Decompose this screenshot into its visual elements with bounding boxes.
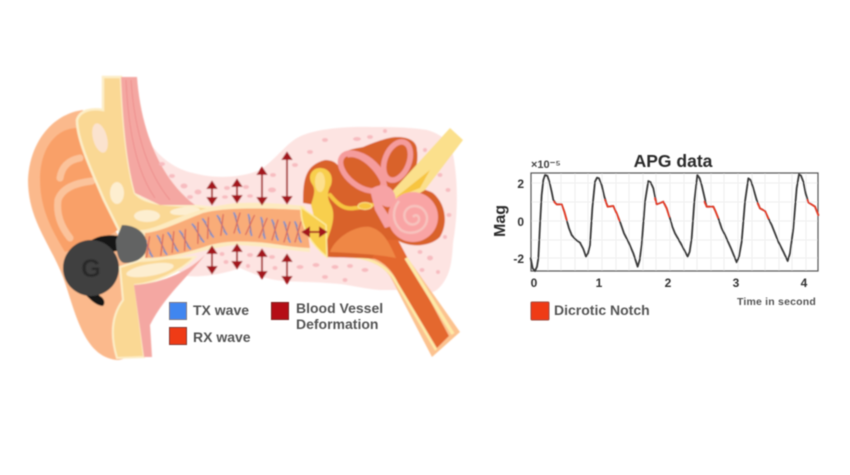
eustachian tube base [327,240,460,357]
x tick labels: 3 [733,276,740,290]
nerve inner [395,170,430,198]
canal hair cells [144,213,301,257]
legend: ear [170,300,383,345]
upper muscle streaks [126,80,170,200]
Blood vessel label: Blood Vessel [296,300,383,316]
malleus and incus [310,168,333,240]
y tick labels: 2 [517,177,524,191]
plot frame [531,173,818,271]
oval window [358,202,372,210]
canal wall [140,203,310,262]
y axis label: Mag [492,205,509,237]
upper cartilage highlights [89,122,200,222]
tissue dots [159,129,452,282]
earbud body [63,240,119,296]
earbud logo: G [81,255,101,283]
chart: APG data [492,151,818,320]
outer ear [28,110,130,360]
x tick labels: 0 [531,276,538,290]
Dicrotic notch label: Dicrotic Notch [554,302,650,318]
Blood vessel swatch [272,302,288,320]
blood vessel deformation arrows [208,153,326,283]
semicircular canals [334,138,416,198]
RX wave label: RX wave [193,329,251,345]
earbud tip [116,225,147,263]
chart title: APG data [634,151,713,171]
middle ear light area [330,227,396,258]
waveform [531,174,818,271]
earbud lower wing [85,288,104,306]
tube right strip [406,258,453,334]
lower cartilage [113,257,195,358]
exponent label: ×10⁻⁵ [531,159,561,171]
Dicrotic notch swatch [531,302,549,320]
upper cartilage [77,77,215,233]
earbud upper wing [88,235,122,255]
x tick labels: 1 [596,276,603,290]
malleus highlight [315,172,325,192]
tube left strip [330,256,436,350]
lower muscle [134,255,205,357]
x axis label: Time in second [737,296,816,308]
cochlea spiral [394,201,427,233]
x tick labels: 4 [801,276,808,290]
x tick labels: 2 [665,276,672,290]
inner ear cavity [303,137,445,262]
ear canal [145,208,310,258]
pink tissue around canal [140,127,457,293]
dicrotic notch highlights [554,198,818,221]
TX wave label: TX wave [193,302,249,318]
ear anatomy diagram [28,77,463,360]
y tick labels: -2 [513,252,524,266]
concha highlights [58,158,92,238]
vestibule [370,185,396,228]
x tick labels [531,276,808,290]
tube orange stripe [372,240,449,348]
cochlea [388,192,438,242]
grid [531,173,818,271]
eardrum [301,207,327,257]
Deformation label: Deformation [296,316,378,332]
nerve bundle [388,128,463,205]
y tick labels [513,177,524,266]
concha [40,128,125,252]
TX wave swatch [170,302,186,320]
stapes [330,195,372,208]
black trace [531,174,818,271]
upper muscle [121,77,195,205]
lower cartilage highlight [125,260,175,280]
y tick labels: 0 [517,215,524,229]
RX wave swatch [170,328,186,344]
